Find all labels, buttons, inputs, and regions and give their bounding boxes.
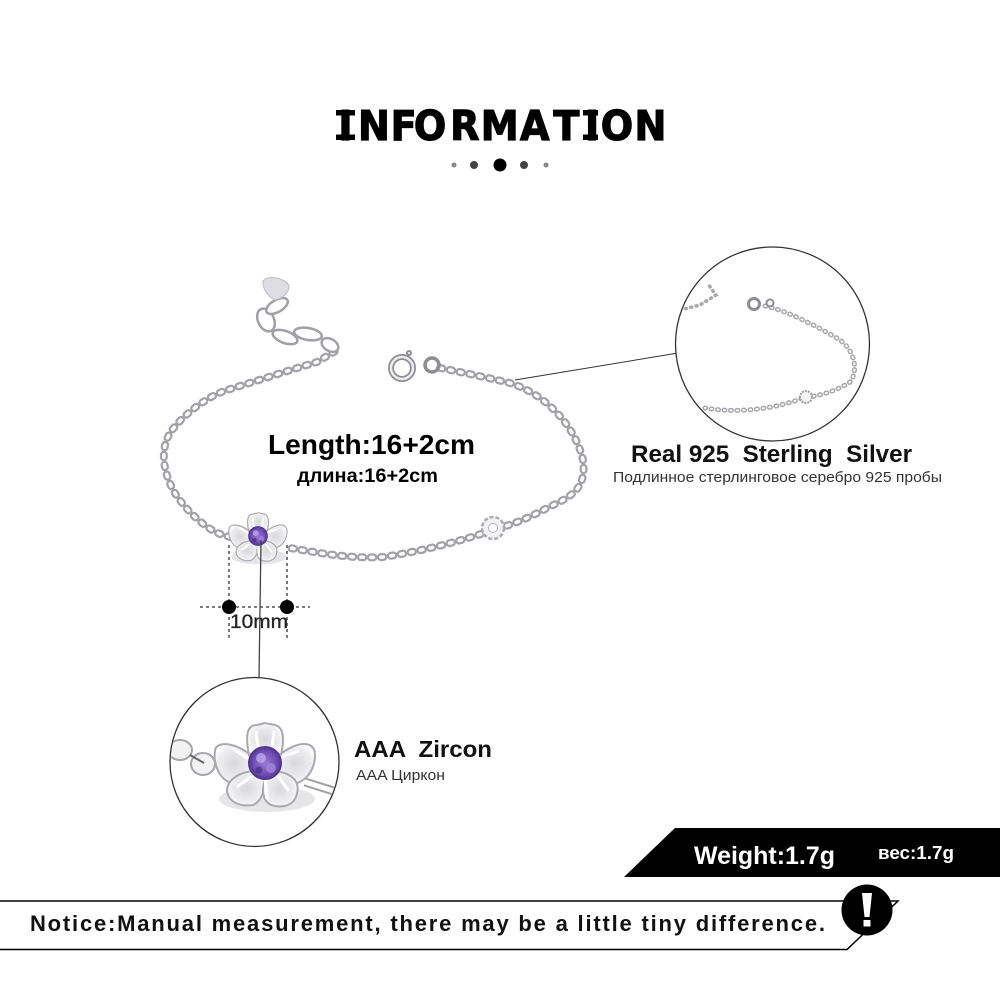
zircon heading: AAA Zircon: [354, 736, 492, 762]
circle: whole bracelet detail: [676, 247, 870, 441]
tag: [263, 278, 289, 300]
purple flower: [229, 513, 287, 564]
small crystal flower: [482, 517, 504, 539]
title: INFORMATION: [338, 103, 666, 150]
weight banner: Weight:1.7g: [694, 842, 835, 870]
extender chain: [254, 295, 341, 355]
callout line to silver circle: [515, 353, 678, 380]
length text: Length:16+2cm: [268, 429, 475, 460]
10mm dimension: [200, 545, 310, 640]
zircon subheading: AAA Циркон: [356, 767, 445, 784]
10mm dimension: 10mm: [230, 612, 288, 633]
clasp: [391, 351, 439, 379]
chain: [164, 350, 584, 557]
notice banner: Notice:Manual measurement, there may be a little tiny difference.: [30, 911, 825, 936]
silver heading: Real 925 Sterling Silver: [631, 441, 912, 468]
length text: длина:16+2cm: [297, 466, 438, 487]
bracelet: [164, 278, 584, 564]
weight banner: вес:1.7g: [878, 843, 954, 863]
length text: [268, 429, 475, 487]
circle: flower detail: [168, 678, 340, 846]
callout line to flower circle: [259, 540, 261, 678]
silver subheading: Подлинное стерлинговое серебро 925 пробы: [613, 469, 942, 486]
notice banner: [0, 884, 898, 950]
icon: exclamation: [842, 884, 892, 936]
weight banner: [624, 828, 1000, 877]
title dots: [452, 158, 548, 172]
